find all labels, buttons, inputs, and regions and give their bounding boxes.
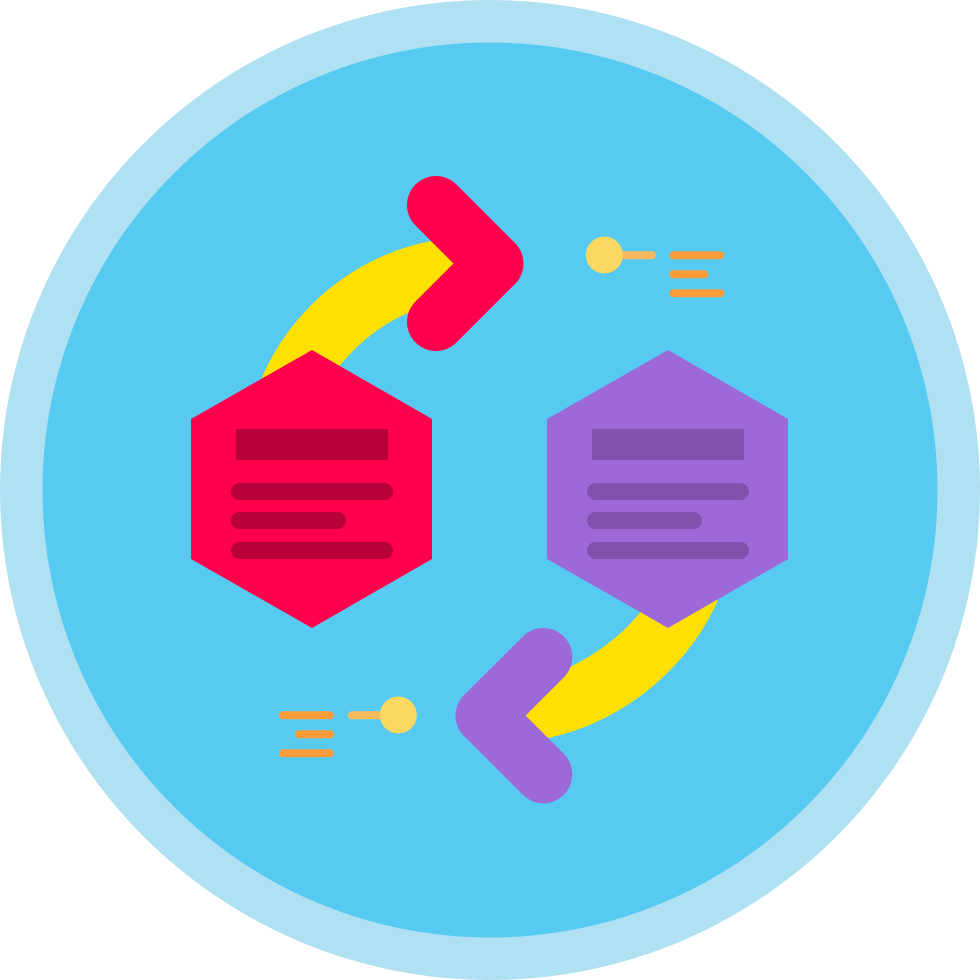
arrow head: top red	[436, 205, 494, 322]
heading bar	[592, 429, 744, 460]
text line 2	[587, 512, 702, 529]
panel: red hexagon	[191, 350, 432, 628]
text line 3	[587, 542, 749, 559]
curved band: top yellow	[261, 241, 460, 380]
text line 1	[587, 483, 749, 500]
heading bar	[236, 429, 388, 460]
text line 1	[231, 483, 393, 500]
arrow head: bottom purple	[484, 657, 543, 774]
curved band: bottom yellow	[520, 600, 718, 738]
text line 2	[231, 512, 346, 529]
callout: bottom left	[279, 696, 417, 757]
callout: top right	[586, 236, 724, 297]
text line 3	[231, 542, 393, 559]
panel: purple hexagon	[547, 350, 788, 628]
